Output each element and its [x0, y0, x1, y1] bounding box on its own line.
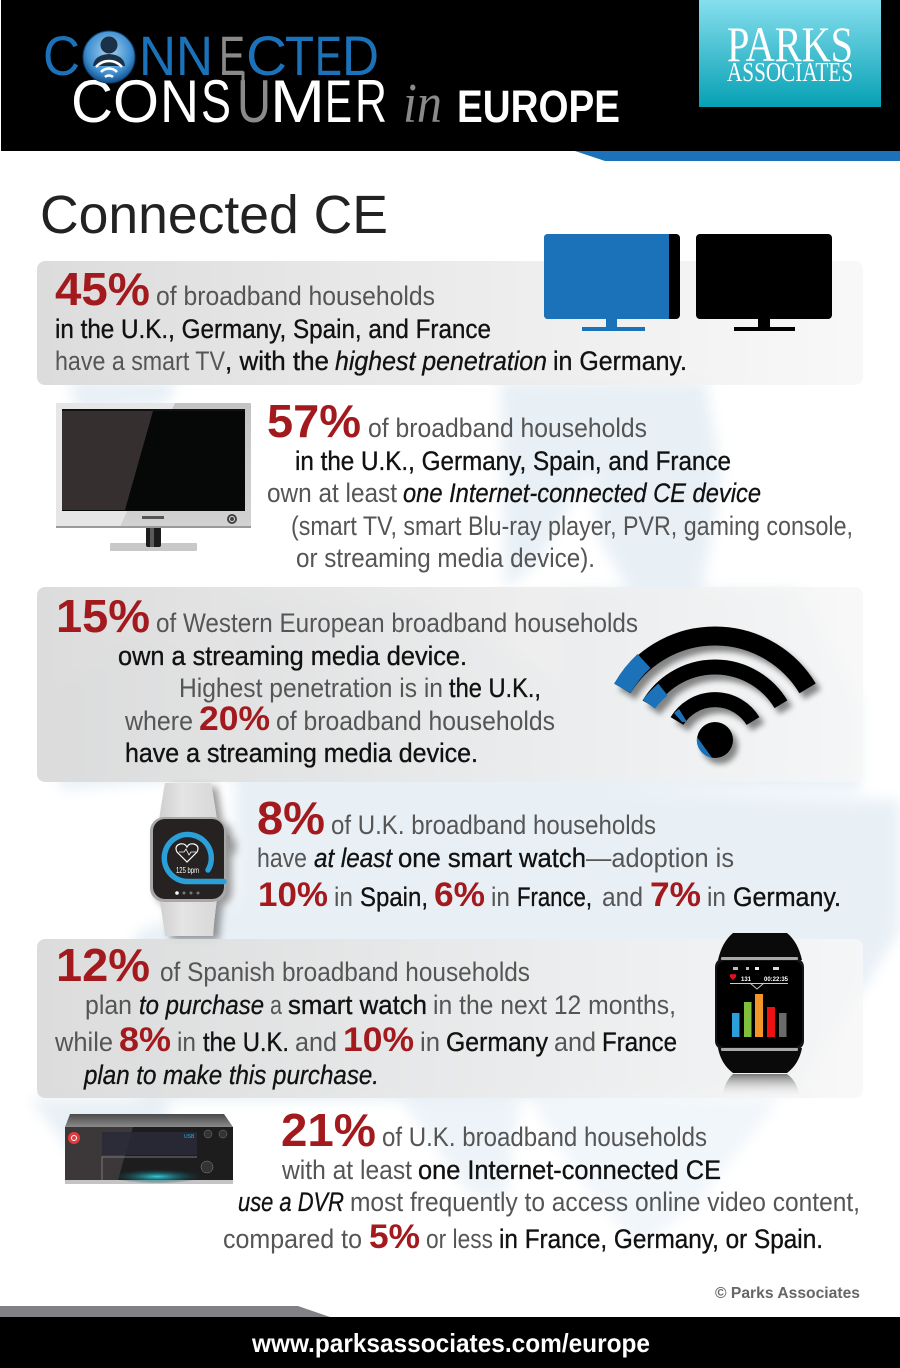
CONNECTED word: D	[342, 24, 379, 87]
icon: black smart watch: 131	[741, 977, 752, 983]
stat text 57%: one Internet-connected CE device	[403, 478, 761, 508]
CONNECTED word: N	[176, 24, 213, 87]
icon: connected person	[83, 31, 135, 83]
CONNECTED word: C	[43, 24, 80, 87]
stat text 21%: in France, Germany, or Spain.	[499, 1224, 823, 1254]
CONSUMER word: U	[237, 68, 271, 135]
stat text 8%: have	[257, 843, 307, 873]
stat text 12%: to purchase	[139, 990, 264, 1020]
stat text 15%: where	[124, 706, 193, 736]
stat text 12%: France	[602, 1027, 677, 1057]
stat text 57%: 57%	[267, 395, 361, 447]
CONNECTED word: T	[285, 24, 314, 87]
stat text 45%: 45%	[55, 263, 150, 315]
CONSUMER word: C	[71, 68, 113, 135]
CONSUMER word	[71, 68, 387, 135]
stat text 12%: smart watch	[288, 990, 427, 1020]
stat text 45%: highest penetration	[335, 346, 547, 376]
CONNECTED word: E	[315, 24, 342, 87]
stat text 45%	[55, 263, 687, 376]
CONNECTED word: C	[246, 24, 287, 87]
CONSUMER word: E	[325, 68, 352, 135]
stat text 12%: in	[177, 1027, 196, 1057]
stat text 21%: of U.K. broadband households	[382, 1122, 707, 1152]
CONNECTED word	[43, 24, 379, 87]
stat text 8%: of U.K. broadband households	[331, 810, 656, 840]
icon: white smart watch	[150, 783, 230, 936]
stat text 21%: one Internet-connected CE	[418, 1155, 721, 1185]
stat text 45%: in the U.K., Germany, Spain, and France	[55, 314, 491, 344]
stat text 8%: one smart watch	[398, 843, 586, 873]
CONNECTED word: O	[87, 24, 131, 87]
stat text 57%: of broadband households	[368, 413, 647, 443]
stat text 12%: 8%	[119, 1021, 171, 1059]
stat text 8%: 7%	[650, 876, 701, 914]
stat text 8%: and	[602, 882, 643, 912]
stat text 8%: in	[491, 882, 510, 912]
CONSUMER word: O	[113, 68, 159, 135]
icon: partly blue TV	[544, 234, 680, 331]
stat text 15%: 15%	[56, 590, 150, 642]
stat text 15%: Highest penetration is in	[179, 673, 443, 703]
stat text 15%: the U.K.,	[449, 673, 541, 703]
panel: connected CE device 57%	[56, 395, 853, 573]
icon: DVR box: USB	[184, 1134, 195, 1140]
stat text 21%: compared to	[223, 1224, 362, 1254]
icon: DVR box	[65, 1114, 233, 1184]
stat text 8%: Spain,	[360, 882, 428, 912]
stat text 15%: have a streaming media device.	[125, 738, 478, 768]
stat text 57%	[267, 395, 853, 573]
footer bar	[0, 1306, 900, 1368]
banner title	[43, 24, 620, 135]
icon: white smart watch: 125 bpm	[176, 866, 199, 875]
header banner	[1, 0, 900, 161]
CONSUMER word: N	[160, 68, 199, 135]
EUROPE word: EUROPE	[457, 81, 620, 132]
panel: smart watch 8%	[150, 783, 841, 936]
stat text 8%: —adoption is	[586, 843, 734, 873]
CONSUMER word: S	[201, 68, 231, 135]
in word: in	[403, 73, 442, 135]
stat text 12%: in	[420, 1027, 440, 1057]
stat text 45%: of broadband households	[156, 281, 435, 311]
stat text 12%	[54, 939, 677, 1090]
icon: black smart watch	[715, 933, 804, 1098]
stat text 8%: in	[707, 882, 726, 912]
panel: smart watch purchase 12%	[37, 933, 863, 1098]
icon: black TV	[696, 234, 832, 331]
stat text 8%: 8%	[257, 792, 325, 844]
stat text 21%: 21%	[281, 1104, 376, 1156]
stat text 21%: 5%	[369, 1218, 420, 1256]
panel: DVR 21%	[65, 1104, 860, 1256]
CONNECTED word: E	[219, 24, 245, 87]
stat text 21%: with at least	[281, 1155, 413, 1185]
Parks Associates logo: ASSOCIATES	[727, 57, 853, 87]
icon: silver TV	[56, 403, 251, 551]
stat text 8%: Germany.	[733, 882, 841, 912]
footer gray accent strip	[0, 1306, 330, 1317]
stat text 12%: a	[270, 990, 282, 1020]
footer URL: www.parksassociates.com/europe	[251, 1328, 650, 1358]
stat text 12%: plan to make this purchase.	[83, 1060, 379, 1090]
stat text 12%: and	[554, 1027, 596, 1057]
header blue accent strip	[575, 151, 900, 161]
stat text 8%: in	[334, 882, 353, 912]
icon: black smart watch: 00:22:35	[764, 977, 789, 983]
panel: streaming media 15%	[37, 587, 863, 782]
stat text 15%: of broadband households	[276, 706, 555, 736]
stat text 8%: at least	[314, 843, 393, 873]
stat text 45%: in Germany.	[553, 346, 687, 376]
stat text 45%: have a smart TV	[55, 346, 225, 376]
Parks Associates logo: PARKS	[727, 16, 853, 72]
stat text 21%: use a DVR	[238, 1187, 344, 1217]
stat text 12%: and	[295, 1027, 337, 1057]
panel: smart TV 45%	[37, 261, 863, 385]
stat text 45%: , with the	[225, 346, 329, 376]
stat text 12%: plan	[85, 990, 132, 1020]
stat text 8%: 10%	[258, 876, 328, 914]
stat text 12%: in the next 12 months,	[433, 990, 676, 1020]
stat text 57%: or streaming media device).	[296, 543, 595, 573]
bar chart on watch	[732, 994, 786, 1037]
stat text 8%: 6%	[434, 876, 485, 914]
stat text 12%: 12%	[56, 939, 150, 991]
section heading: Connected CE	[40, 185, 388, 245]
stat text 21%: or less	[426, 1224, 493, 1254]
gray connector between E and U	[222, 73, 243, 84]
Parks Associates logo	[699, 0, 881, 107]
CONNECTED word: N	[139, 24, 176, 87]
stat text 21%	[223, 1104, 860, 1256]
CONSUMER word: R	[355, 68, 387, 135]
stat text 12%: 10%	[343, 1021, 414, 1059]
stat text 21%: most frequently to access online video content,	[350, 1187, 860, 1217]
stat text 12%: of Spanish broadband households	[160, 957, 530, 987]
stat text 15%	[56, 590, 638, 768]
stat text 8%	[257, 792, 841, 914]
icon: wifi	[622, 636, 808, 758]
stat text 57%: in the U.K., Germany, Spain, and France	[295, 446, 731, 476]
stat text 12%: while	[54, 1027, 113, 1057]
stat text 15%: own a streaming media device.	[118, 641, 467, 671]
stat text 15%: 20%	[199, 700, 270, 738]
CONSUMER word: M	[270, 68, 325, 135]
stat text 12%: Germany	[446, 1027, 549, 1057]
stat text 15%: of Western European broadband households	[156, 608, 638, 638]
stat text 57%: own at least	[267, 478, 398, 508]
copyright: © Parks Associates	[715, 1285, 860, 1302]
icon: blue and black TVs chart	[544, 234, 832, 331]
background map of Europe	[30, 380, 900, 1250]
stat text 8%: France,	[517, 882, 592, 912]
stat text 12%: the U.K.	[203, 1027, 289, 1057]
